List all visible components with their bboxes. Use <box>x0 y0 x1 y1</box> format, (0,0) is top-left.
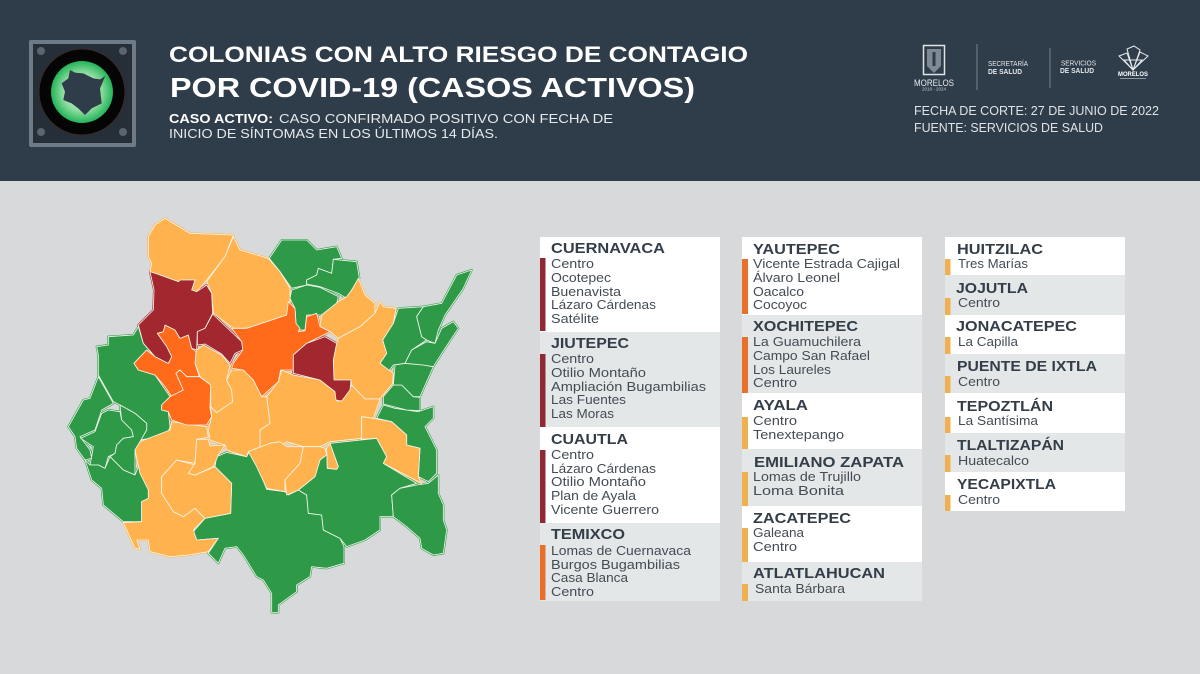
card: Temixco: TEMIXCO <box>551 526 625 543</box>
card: Tepoztlán: TEPOZTLÁN <box>957 398 1053 415</box>
very high risk municipalities (dark red) <box>138 272 351 401</box>
card: Ayala: Centro <box>753 413 797 428</box>
high risk municipalities (orange) <box>134 302 330 425</box>
card: Yautepec: Álvaro Leonel <box>753 270 840 285</box>
card: Jiutepec: JIUTEPEC <box>551 335 629 352</box>
card: Huitzilac <box>945 237 1125 275</box>
card: Yautepec: Vicente Estrada Cajigal <box>753 256 900 271</box>
card: Xochitepec: Centro <box>753 375 797 390</box>
low risk municipalities (green) <box>68 240 472 613</box>
card: Zacatepec: ZACATEPEC <box>753 510 851 527</box>
card: Jojutla: JOJUTLA <box>956 280 1028 297</box>
card: Puente de Ixtla <box>945 354 1125 393</box>
logo: Morelos flower <box>1118 46 1149 79</box>
definition text: INICIO DE SÍNTOMAS EN LOS ÚLTIMOS 14 DÍAS. <box>169 126 498 141</box>
card: Temixco: Centro <box>551 584 594 599</box>
card: Emiliano Zapata: Loma Bonita <box>753 483 845 498</box>
card: Emiliano Zapata: EMILIANO ZAPATA <box>754 454 904 471</box>
logo: Servicios de Salud <box>1050 48 1096 88</box>
card: Xochitepec: XOCHITEPEC <box>753 318 858 335</box>
card: Jiutepec: Centro <box>551 351 594 366</box>
map regions with white borders <box>68 218 472 613</box>
card: Jonacatepec: La Capilla <box>958 334 1019 349</box>
card: Jiutepec: Las Moras <box>551 406 615 421</box>
logo: Secretaría de Salud: SECRETARÍA <box>988 59 1028 68</box>
card: Yautepec: YAUTEPEC <box>753 241 840 258</box>
card: Temixco <box>540 523 720 601</box>
card: Jiutepec: Las Fuentes <box>551 392 627 407</box>
card: Ayala: AYALA <box>753 397 808 414</box>
card: Yecapixtla: Centro <box>958 492 1000 507</box>
column 3 lists <box>945 237 1125 511</box>
logo: Morelos flower: MORELOS <box>1118 71 1149 78</box>
card: Cuautla: Otilio Montaño <box>551 474 646 489</box>
date and source: FUENTE: SERVICIOS DE SALUD <box>914 121 1103 135</box>
card: Cuernavaca <box>540 237 720 332</box>
card: Puente de Ixtla: Centro <box>958 374 1000 389</box>
card: Cuautla <box>540 427 720 523</box>
card: Tlaltizapán: TLALTIZAPÁN <box>957 437 1064 454</box>
card: Temixco: Casa Blanca <box>551 570 629 585</box>
card: Cuernavaca: Satélite <box>551 311 599 326</box>
date and source: FECHA DE CORTE: 27 DE JUNIO DE 2022 <box>914 104 1159 118</box>
card: Yautepec: Cocoyoc <box>753 297 808 312</box>
card: Huitzilac: HUITZILAC <box>957 241 1043 258</box>
icon: traffic light with Morelos map <box>29 40 136 147</box>
card: Cuautla: Vicente Guerrero <box>551 502 659 517</box>
card: Tlaltizapán: Huatecalco <box>958 453 1029 468</box>
card: Zacatepec: Galeana <box>753 525 805 540</box>
definition text: CASO ACTIVO: <box>169 112 273 126</box>
card: Temixco: Lomas de Cuernavaca <box>551 543 692 558</box>
map base fill closing seams between regions <box>68 218 472 613</box>
card: Jiutepec: Otilio Montaño <box>551 365 646 380</box>
card: Yautepec: Oacalco <box>753 284 804 299</box>
card: Cuernavaca: Centro <box>551 256 594 271</box>
card: Yecapixtla <box>945 472 1125 511</box>
card: Temixco: Burgos Bugambilias <box>551 557 681 572</box>
card: Xochitepec: Los Laureles <box>753 362 832 377</box>
card: Cuernavaca: CUERNAVACA <box>551 240 665 257</box>
card: Cuernavaca: Ocotepec <box>551 270 612 285</box>
card: Emiliano Zapata: Lomas de Trujillo <box>753 469 861 484</box>
card: Jonacatepec <box>945 315 1125 354</box>
definition text <box>169 112 613 141</box>
card: Yecapixtla: YECAPIXTLA <box>957 476 1056 493</box>
card: Emiliano Zapata <box>742 449 922 506</box>
title: COLONIAS CON ALTO RIESGO DE CONTAGIO <box>169 42 748 67</box>
card: Cuautla: Plan de Ayala <box>551 488 637 503</box>
card: Jiutepec <box>540 332 720 428</box>
title <box>169 42 748 103</box>
logo: Servicios de Salud: SERVICIOS <box>1061 60 1096 68</box>
logo: Secretaría de Salud <box>976 44 1028 90</box>
card: Jojutla: Centro <box>958 295 1000 310</box>
column 1 lists <box>540 237 720 601</box>
card: Tepoztlán: La Santísima <box>958 413 1039 428</box>
card: Cuautla: Lázaro Cárdenas <box>551 461 657 476</box>
card: Jonacatepec: JONACATEPEC <box>956 318 1077 335</box>
card: Cuernavaca: Lázaro Cárdenas <box>551 297 657 312</box>
card: Jiutepec: Ampliación Bugambilias <box>551 379 707 394</box>
definition text: CASO CONFIRMADO POSITIVO CON FECHA DE <box>279 112 613 126</box>
header band <box>0 0 1200 181</box>
card: Tlaltizapán <box>945 433 1125 472</box>
card: Atlatlahucan: ATLATLAHUCAN <box>753 565 885 582</box>
column 2 lists <box>742 237 922 601</box>
logo: Secretaría de Salud: DE SALUD <box>988 69 1022 76</box>
card: Tepoztlán <box>945 393 1125 433</box>
map of Morelos municipalities by risk <box>68 218 472 613</box>
title: POR COVID-19 (CASOS ACTIVOS) <box>170 72 695 103</box>
card: Yautepec <box>742 237 922 315</box>
card: Huitzilac: Tres Marías <box>958 256 1029 271</box>
card: Ayala <box>742 393 922 449</box>
logo: Morelos coat of arms: MORELOS <box>914 78 954 88</box>
logo: Morelos coat of arms: 2018 - 2024 <box>922 86 946 92</box>
card: Xochitepec: La Guamuchilera <box>753 334 862 349</box>
card: Cuernavaca: Buenavista <box>551 284 622 299</box>
card: Zacatepec: Centro <box>753 539 797 554</box>
card: Xochitepec: Campo San Rafael <box>753 348 870 363</box>
card: Xochitepec <box>742 315 922 393</box>
card: Atlatlahucan: Santa Bárbara <box>755 581 846 596</box>
card: Atlatlahucan <box>742 562 922 601</box>
card: Zacatepec <box>742 506 922 562</box>
logo: Morelos coat of arms <box>914 46 954 92</box>
card: Ayala: Tenextepango <box>753 427 844 442</box>
card: Cuautla: CUAUTLA <box>551 431 628 448</box>
card: Cuautla: Centro <box>551 447 594 462</box>
card: Puente de Ixtla: PUENTE DE IXTLA <box>957 358 1097 375</box>
medium risk municipalities (light orange) <box>123 218 422 557</box>
date and source <box>914 104 1159 135</box>
logo: Servicios de Salud: DE SALUD <box>1060 68 1094 75</box>
card: Jojutla <box>945 275 1125 315</box>
